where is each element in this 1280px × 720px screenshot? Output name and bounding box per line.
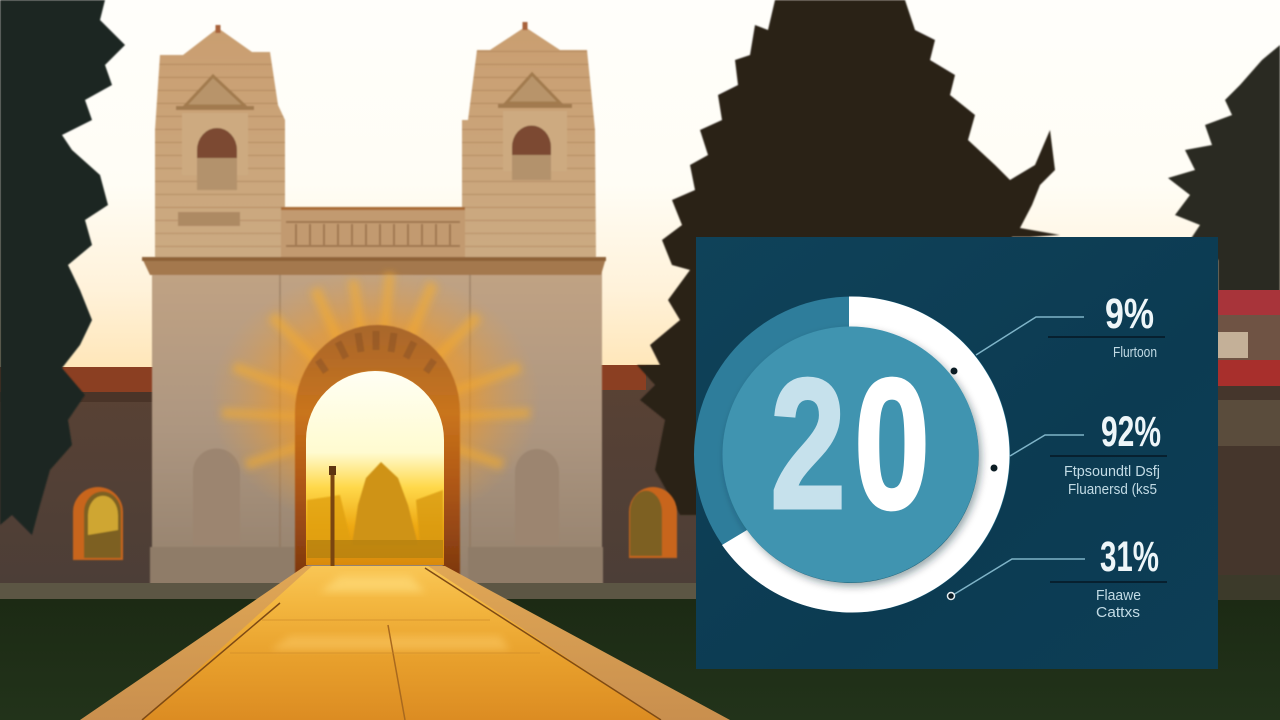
ring white arc <box>722 296 1009 612</box>
walkway <box>80 566 730 720</box>
sun rays <box>222 272 530 470</box>
lamp post <box>329 466 336 568</box>
arch opening <box>306 371 444 565</box>
callout: 31%: 31% <box>1100 533 1159 581</box>
donut chart <box>694 296 1010 612</box>
cornice <box>142 257 606 275</box>
callout: 31%: Flaawe <box>1096 587 1141 604</box>
big number: 2 <box>770 341 846 548</box>
gate building <box>142 22 606 585</box>
main body <box>152 272 602 584</box>
big number <box>770 341 930 548</box>
callout: 9% <box>950 290 1165 374</box>
callout: 31% <box>948 533 1167 621</box>
window: left side wall <box>73 487 123 560</box>
base steps <box>150 547 603 585</box>
callout: 9%: 9% <box>1105 290 1154 338</box>
big number: 0 <box>854 341 930 548</box>
lawn: left <box>0 599 300 720</box>
niche: right <box>515 449 559 545</box>
side wall: left <box>0 367 156 585</box>
callout: 92%: 92% <box>1101 408 1161 456</box>
callout: 92%: Ftpsoundtl Dsfj <box>1064 463 1160 480</box>
panel: statistics <box>694 237 1218 669</box>
distant trees <box>307 462 443 545</box>
side wall: right <box>596 365 696 583</box>
tree: right silhouette <box>1168 45 1280 300</box>
right building <box>1218 290 1280 585</box>
inner disc <box>722 326 978 582</box>
sun glow <box>210 270 540 530</box>
parapet <box>281 207 465 259</box>
tree: centre silhouette <box>637 0 1060 515</box>
left tower <box>155 25 285 257</box>
arch <box>295 325 460 578</box>
distant hedge <box>307 540 443 558</box>
callout: 31%: Cattxs <box>1096 604 1140 621</box>
callout: 9%: Flurtoon <box>1113 344 1157 361</box>
tree: left silhouette <box>0 0 125 535</box>
ground strip <box>0 583 696 600</box>
niche: left <box>193 448 240 545</box>
right tower <box>462 22 596 257</box>
panel background <box>696 237 1218 669</box>
lawn: right <box>450 599 1280 720</box>
ring track <box>694 296 1010 612</box>
right lawn beyond panel <box>1218 575 1280 600</box>
callout: 92% <box>990 408 1167 498</box>
callout: 92%: Fluanersd (ks5 <box>1068 481 1157 498</box>
window: right side wall <box>629 487 677 558</box>
sky background <box>0 0 1280 370</box>
pier seams <box>280 275 470 547</box>
